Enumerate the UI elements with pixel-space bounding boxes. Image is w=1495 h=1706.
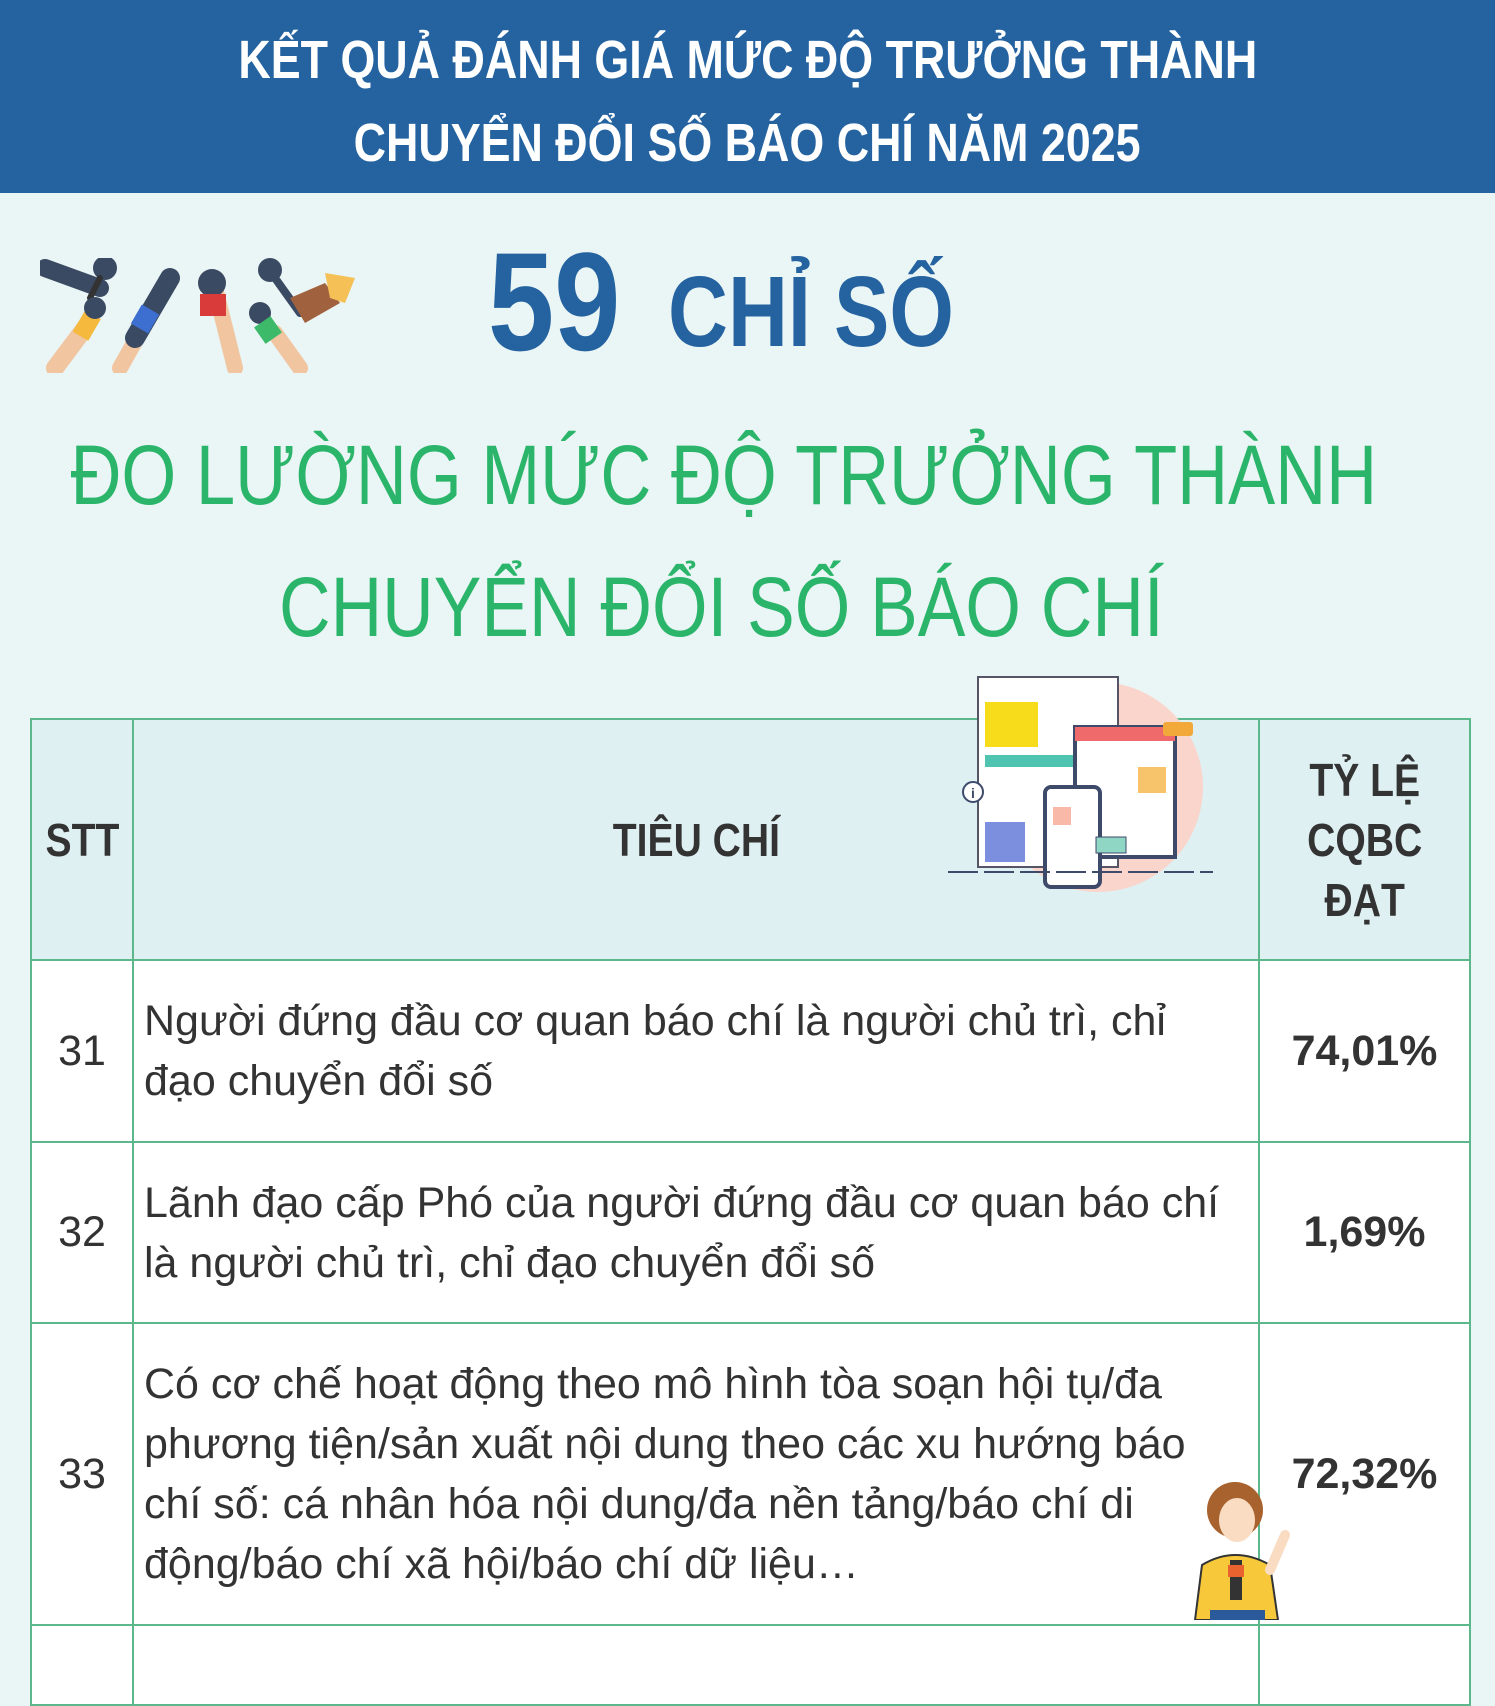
row 33: Có cơ chế hoạt động theo mô hình tòa soạn hội tụ/đa [144, 1360, 1162, 1408]
table header: STT [45, 814, 119, 866]
row 31 [31, 960, 1470, 1142]
icon: microphones [40, 258, 355, 373]
row 33: phương tiện/sản xuất nội dung theo các xu hướng báo [144, 1420, 1186, 1468]
row 32: Lãnh đạo cấp Phó của người đứng đầu cơ quan báo chí [144, 1178, 1219, 1226]
row 31: đạo chuyển đổi số [144, 1057, 493, 1105]
icon: devices illustration [948, 676, 1213, 892]
icon: reporter [1194, 1482, 1290, 1620]
row 32: 1,69% [1304, 1208, 1425, 1256]
row 33 [31, 1323, 1470, 1625]
big number 59 CHỈ SỐ: CHỈ SỐ [668, 256, 954, 368]
next row (partial) [31, 1625, 1470, 1705]
row 32 [31, 1142, 1470, 1323]
row 33: động/báo chí xã hội/báo chí dữ liệu… [144, 1540, 859, 1588]
big number 59 CHỈ SỐ: 59 [488, 223, 620, 380]
green heading line 2: CHUYỂN ĐỔI SỐ BÁO CHÍ [279, 560, 1164, 654]
big number 59 CHỈ SỐ [488, 223, 954, 380]
row 31: 31 [58, 1026, 106, 1074]
title line 1: KẾT QUẢ ĐÁNH GIÁ MỨC ĐỘ TRƯỞNG THÀNH [238, 30, 1257, 90]
row 31: Người đứng đầu cơ quan báo chí là người chủ trì, chỉ [144, 997, 1166, 1045]
table header [32, 720, 1469, 1704]
title line 2: CHUYỂN ĐỔI SỐ BÁO CHÍ NĂM 2025 [354, 113, 1141, 173]
header banner [0, 0, 1495, 193]
icon: devices illustration: i [971, 785, 975, 801]
row 33: 72,32% [1292, 1450, 1437, 1498]
green heading line 1: ĐO LƯỜNG MỨC ĐỘ TRƯỞNG THÀNH [70, 428, 1377, 522]
table header: TỶ LỆ [1309, 754, 1420, 806]
row 32: 32 [58, 1208, 106, 1256]
table header: CQBC [1307, 814, 1422, 866]
row 32: là người chủ trì, chỉ đạo chuyển đổi số [144, 1238, 875, 1286]
table header: TIÊU CHÍ [612, 814, 780, 866]
table [30, 718, 1471, 1706]
table header: ĐẠT [1324, 874, 1405, 926]
row 33: 33 [58, 1450, 106, 1498]
row 33: chí số: cá nhân hóa nội dung/đa nền tảng/báo chí di [144, 1480, 1134, 1528]
row 31: 74,01% [1292, 1026, 1437, 1074]
